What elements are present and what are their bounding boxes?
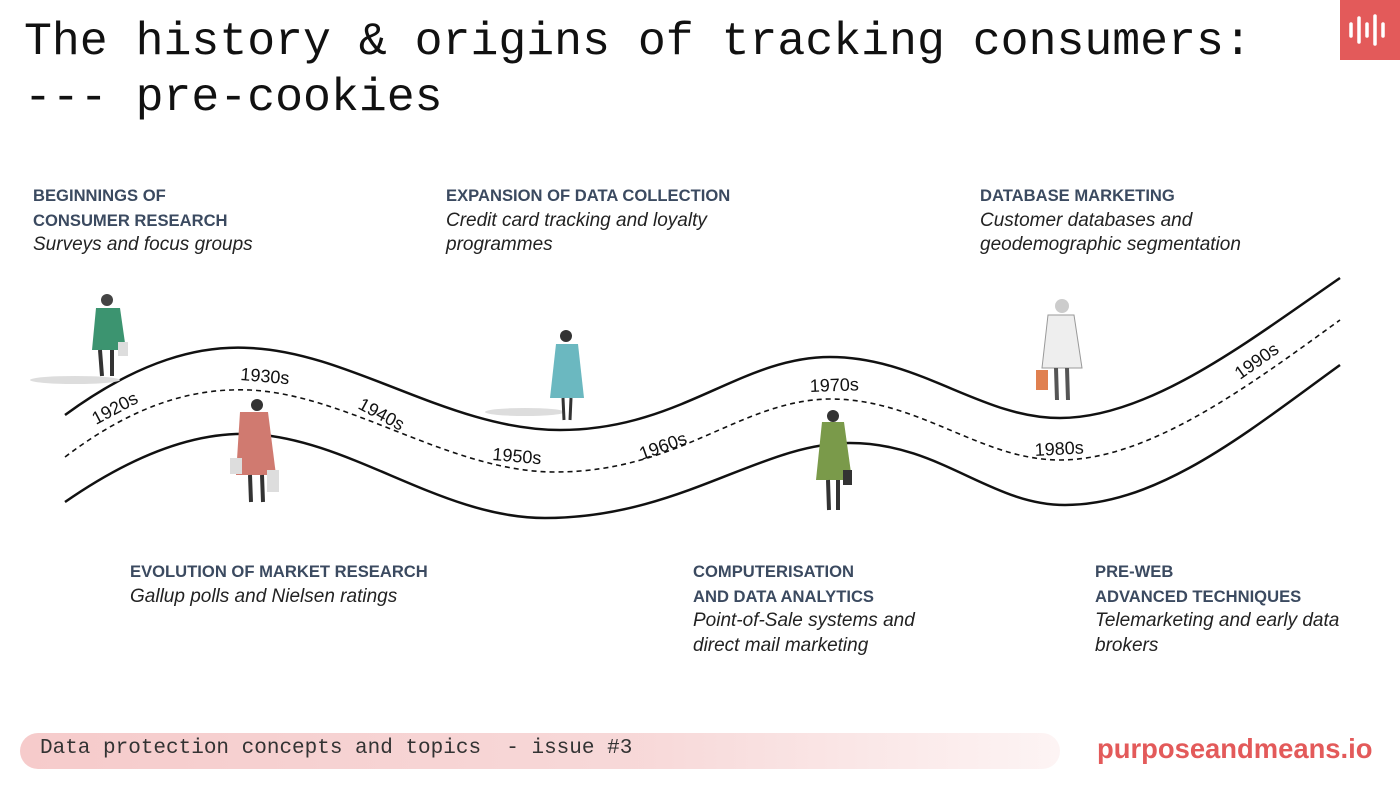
title: --- pre-cookies	[24, 71, 443, 124]
text: database: DATABASE MARKETING	[980, 186, 1175, 205]
text: beginnings: CONSUMER RESEARCH	[33, 210, 228, 230]
icon: logo	[1340, 0, 1400, 60]
title: The history & origins of tracking consumers:	[24, 15, 1252, 68]
footer text: Data protection concepts and topics - issue #3	[40, 737, 632, 760]
text: pre-web: PRE-WEB	[1095, 562, 1173, 581]
timeline road: 1970s	[809, 374, 859, 396]
text: computerisation: COMPUTERISATION	[693, 562, 854, 581]
timeline road: 1990s	[1231, 339, 1282, 383]
title	[24, 15, 1252, 124]
text: expansion: EXPANSION OF DATA COLLECTION	[446, 186, 730, 205]
text: expansion: Credit card tracking and loyalty	[446, 210, 707, 230]
footer banner	[20, 733, 1060, 769]
figures	[30, 294, 1082, 510]
timeline road: 1940s	[355, 394, 408, 435]
text: expansion	[446, 186, 730, 255]
timeline road: 1920s	[88, 388, 141, 429]
text: database: Customer databases and	[980, 210, 1192, 230]
text: evolution	[130, 562, 428, 606]
text: pre-web: ADVANCED TECHNIQUES	[1095, 586, 1301, 606]
text: database	[980, 186, 1241, 255]
text: expansion: programmes	[446, 234, 553, 255]
text: evolution: EVOLUTION OF MARKET RESEARCH	[130, 562, 428, 581]
text: computerisation	[693, 562, 916, 656]
footer brand: purposeandmeans.io	[1097, 733, 1372, 764]
timeline road: 1950s	[492, 444, 542, 468]
text: computerisation: Point-of-Sale systems and	[693, 610, 915, 631]
timeline road: 1930s	[240, 364, 290, 388]
text: pre-web: brokers	[1095, 634, 1158, 656]
text: beginnings: BEGINNINGS OF	[33, 186, 166, 205]
text: computerisation: AND DATA ANALYTICS	[693, 586, 874, 606]
timeline road: 1980s	[1034, 437, 1084, 460]
timeline road: 1960s	[637, 428, 689, 464]
text: pre-web: Telemarketing and early data	[1095, 610, 1339, 631]
text: computerisation: direct mail marketing	[693, 634, 868, 656]
text: database: geodemographic segmentation	[980, 234, 1241, 255]
text: beginnings	[33, 186, 253, 255]
text: beginnings: Surveys and focus groups	[33, 234, 253, 255]
text: pre-web	[1095, 562, 1339, 656]
text: evolution: Gallup polls and Nielsen ratings	[130, 586, 397, 606]
